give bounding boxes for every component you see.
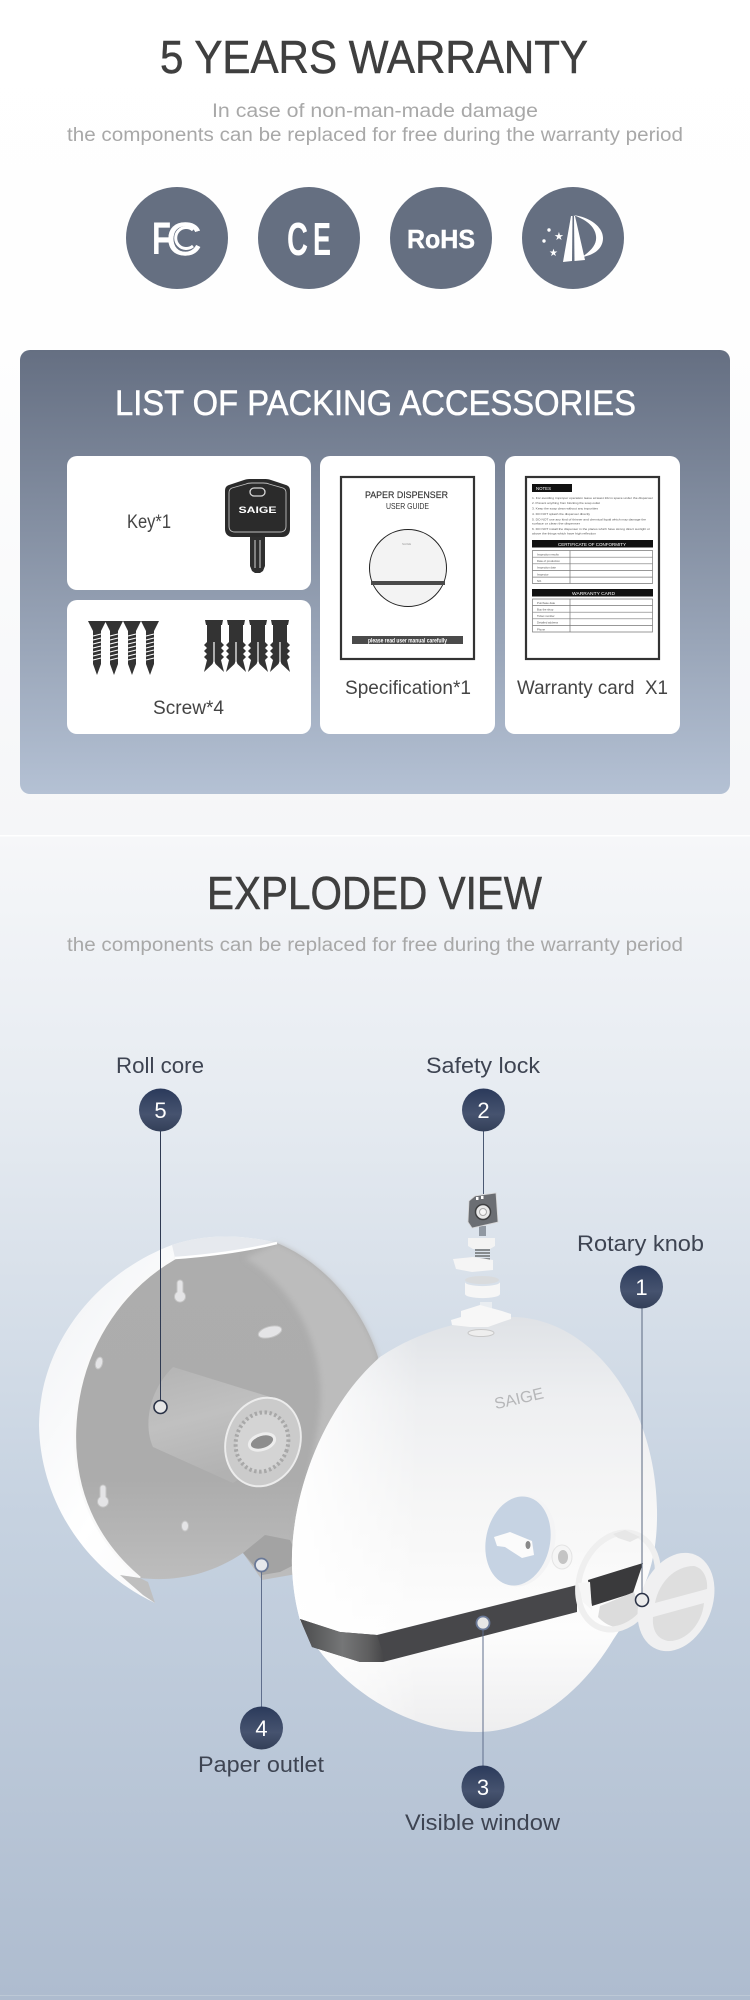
exploded product: front cover [292,1317,657,1732]
callout 3: visible window: Visible window [405,1810,560,1835]
knob opening [477,1489,572,1593]
soft left highlight [292,1317,657,1732]
warranty card document: surface or clean the dispenser [532,522,580,526]
warranty card document: WARRANTY CARD [572,591,616,596]
icon: CE certification: C [287,213,308,265]
card: screws [67,600,311,734]
callout 4: paper outlet: Paper outlet [198,1752,324,1777]
roll core cylinder [148,1367,312,1496]
warranty card document: 6. DO NOT install the dispenser in the places which have strong direct sunlight or [532,527,650,531]
warranty card document: Phone [537,627,546,631]
card: specification [320,456,495,734]
icon: key: SAIGE [238,505,276,516]
heading: exploded view: EXPLODED VIEW [207,867,543,919]
callout 5: roll core [116,1053,204,1414]
shell lower lip [120,1575,155,1603]
warranty card document: 4. DO NOT splash the dispenser directly [532,512,591,516]
title: 5 years warranty: 5 YEARS WARRANTY [160,31,588,83]
warranty card document: Inspector [537,572,549,576]
exploded product: back shell [39,1236,378,1603]
icon: RoHS certification: RoHS [407,224,475,254]
icon: wall anchors [204,620,290,672]
warranty card document: Detailed address [537,621,559,625]
callout 2: safety lock: Safety lock [426,1053,541,1078]
card: warranty [505,456,680,734]
warranty card document: 5. DO NOT use any kind of thinner and chemical liquid which may damage the [532,518,647,522]
warranty card document: 3. Keep the soap clean without any impurities [532,506,599,510]
warranty subtitle: the components can be replaced for free during the warranty period [67,125,683,146]
icon: FCC certification: C [166,213,202,265]
callout 3: visible window [405,1616,560,1835]
card: specification: Specification*1 [345,677,471,699]
icon: FCC certification: F [152,213,171,264]
user guide document [341,477,474,659]
card: screws: Screw*4 [153,698,224,719]
icon: CE certification: E [313,213,331,265]
callout 4: paper outlet: 4 [255,1716,268,1741]
exploded view subtitle: the components can be replaced for free during the warranty period [67,935,683,956]
safety lock assembly [451,1193,511,1336]
warranty card document: Inspection results [537,552,559,556]
icon: FCC certification [126,187,228,289]
warranty card document: Inspection date [537,566,556,570]
warranty card document: Purchase date [537,601,555,605]
brand mark: SAIGE [493,1385,545,1413]
card: key: Key*1 [127,512,171,533]
callout 5: roll core: Roll core [116,1053,204,1078]
warranty subtitle [67,101,683,146]
icon: screws [88,621,159,675]
warranty card document: CERTIFICATE OF CONFORMITY [558,542,626,547]
card: warranty: Warranty card X1 [517,677,668,699]
rotary knob ring [564,1520,672,1642]
visible window band [300,1563,643,1662]
warranty card document: above the things which have high reflection [532,532,597,536]
callout 2: safety lock: 2 [477,1098,490,1123]
warranty card document: NO. [537,579,542,583]
card: key [67,456,311,590]
warranty subtitle: In case of non-man-made damage [212,101,538,122]
user guide document: USER GUIDE [386,501,429,511]
icon: CE certification [258,187,360,289]
packing heading: LIST OF PACKING ACCESSORIES [115,384,636,423]
callout 3: visible window: 3 [477,1775,489,1800]
callout 1: rotary knob: Rotary knob [577,1231,704,1256]
warranty card document: 1. For avoiding improper operation leave at least 10cm space under the dispenser [532,496,653,500]
user guide document: please read user manual carefully [368,637,447,644]
warranty card document [526,477,659,659]
shell outer rim [39,1236,277,1603]
callout 2: safety lock [426,1053,541,1194]
icon: patent mark [522,187,624,289]
warranty card document: Ticket number [537,614,555,618]
warranty card document: Buy the shop [537,608,554,612]
keyhole slots and holes [94,1280,283,1531]
callout 1: rotary knob [577,1231,704,1606]
callout 5: roll core: 5 [154,1098,167,1123]
shell white inner edge [75,1258,175,1578]
outlet chute [243,1535,300,1575]
icon: key [225,479,290,573]
shell interior [75,1243,378,1580]
panel: packing accessories [20,350,730,794]
rotary knob cap [624,1541,728,1663]
icon: RoHS certification [390,187,492,289]
callout 1: rotary knob: 1 [635,1275,648,1300]
warranty card document: 2. Prevent anything from blocking the soap outlet [532,501,600,505]
callout 4: paper outlet [198,1558,324,1777]
user guide document: SAIGE [402,542,411,546]
warranty card document: NOTES [536,486,551,491]
icon: patent mark: ★ [549,248,558,259]
warranty card document: Date of production [537,559,560,563]
user guide document: PAPER DISPENSER [365,490,448,501]
icon: patent mark: ★ [554,231,564,243]
